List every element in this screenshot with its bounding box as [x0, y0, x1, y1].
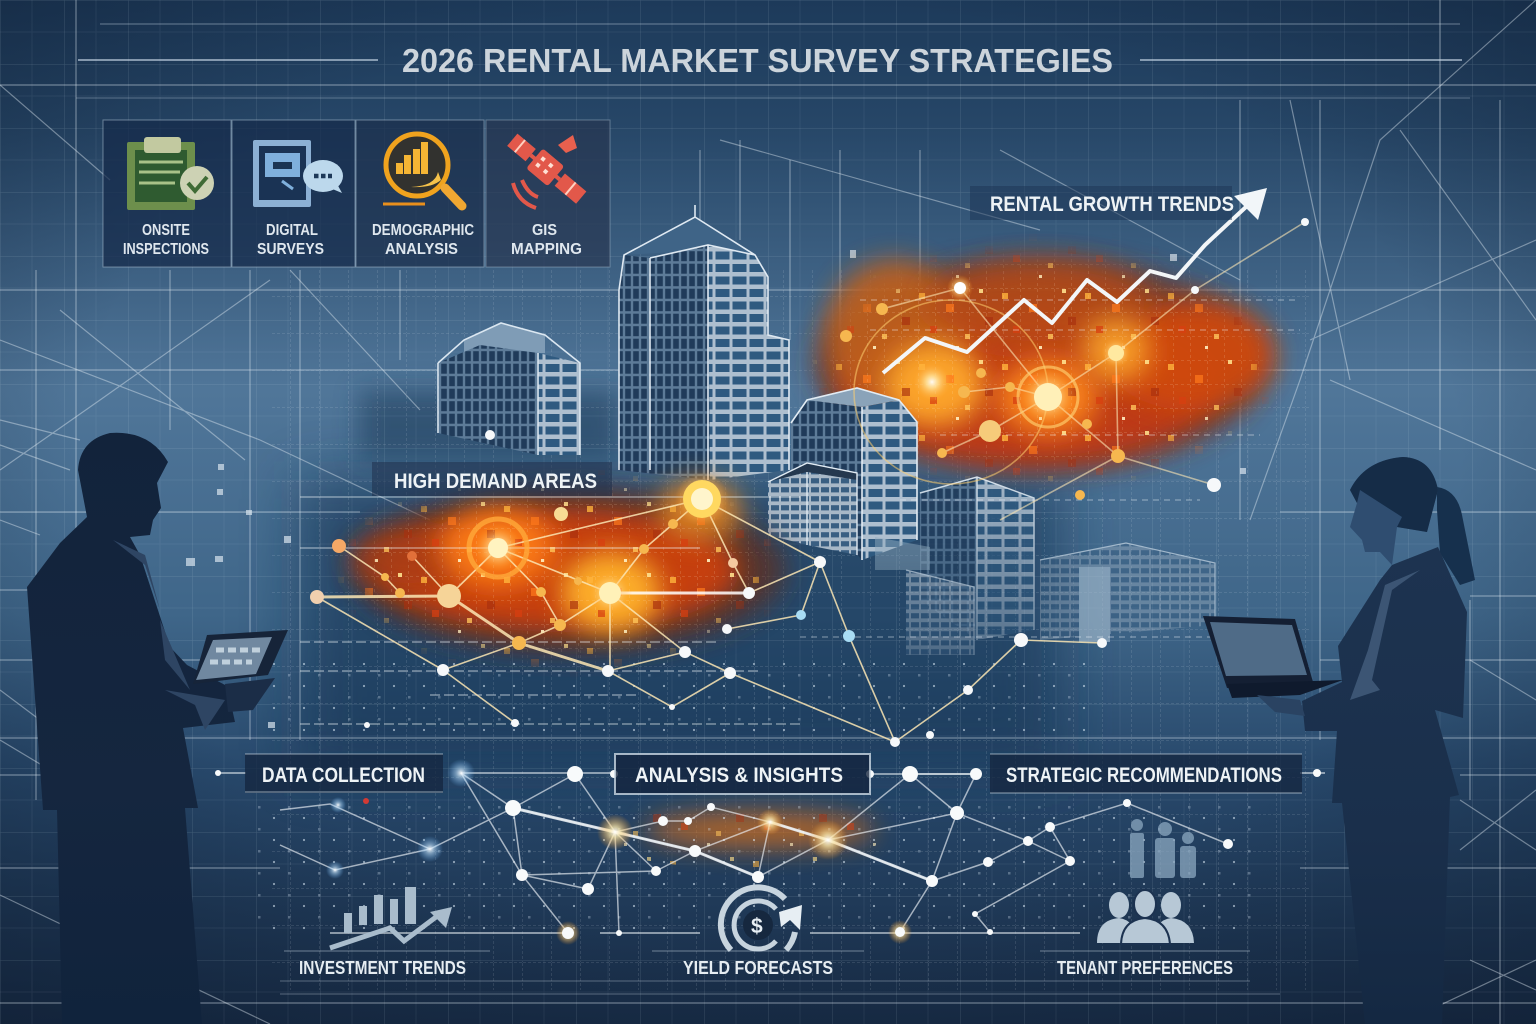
panel: digital surveys: SURVEYS — [257, 241, 324, 258]
panel: gis mapping: MAPPING — [511, 241, 582, 258]
icon: woman's laptop — [1203, 616, 1343, 716]
building: lower front block — [875, 537, 974, 655]
building: right mid tower — [791, 388, 917, 560]
icon: faded people group — [1130, 819, 1196, 878]
lower network connections — [218, 773, 1325, 933]
panel: demographic analysis: DEMOGRAPHIC — [372, 222, 474, 239]
icon: yield forecast dollar — [721, 887, 802, 950]
process step: strategic recommendations: STRATEGIC RECOMMENDATIONS — [1006, 764, 1282, 787]
top frame lines — [76, 24, 1470, 98]
process step: data collection — [245, 754, 443, 793]
silhouette: man with tablet — [27, 433, 235, 1024]
panel: survey methods — [103, 120, 610, 267]
process step: strategic recommendations — [990, 754, 1302, 793]
lower network nodes — [215, 759, 1321, 945]
process step: analysis and insights — [615, 754, 870, 794]
heat map: lower network glow — [600, 808, 880, 868]
building: central tower — [619, 205, 789, 480]
label: high demand areas: HIGH DEMAND AREAS — [394, 470, 597, 493]
data grid rails — [300, 300, 1300, 724]
dotted data field — [250, 655, 1260, 930]
panel: demographic analysis: ANALYSIS — [385, 241, 458, 258]
heat map: upper right — [800, 230, 1300, 500]
process step: data collection: DATA COLLECTION — [262, 764, 425, 787]
heat map: high demand areas — [310, 470, 785, 680]
upper network nodes — [310, 218, 1309, 747]
rental growth chart line — [883, 188, 1267, 373]
building: front low block — [768, 463, 857, 555]
bottom rail lines — [280, 981, 1280, 994]
panel: digital surveys — [232, 120, 355, 267]
label: yield forecasts: YIELD FORECASTS — [683, 958, 833, 978]
icon: yield forecast dollar: $ — [751, 915, 763, 938]
building: right block — [920, 477, 1034, 640]
panel: digital surveys: DIGITAL — [266, 222, 318, 239]
icon: tenant people group — [1097, 890, 1194, 944]
label: rental growth trends — [970, 186, 1234, 220]
panel: onsite inspections: INSPECTIONS — [123, 241, 209, 258]
panel: onsite inspections: ONSITE — [142, 222, 190, 239]
process step: analysis and insights: ANALYSIS & INSIGHTS — [635, 764, 843, 787]
panel: onsite inspections — [103, 120, 231, 267]
silhouette: woman with laptop — [1302, 457, 1475, 1024]
icon: investment trends chart — [330, 887, 452, 948]
panel: gis mapping: GIS — [532, 222, 557, 239]
label: investment trends: INVESTMENT TRENDS — [299, 958, 466, 978]
panel: gis mapping — [486, 120, 610, 267]
icon: man's tablet — [193, 630, 288, 712]
upper network connections — [317, 222, 1305, 742]
building: left mid-rise — [438, 323, 580, 455]
building: faded far right — [1040, 543, 1215, 642]
label: rental growth trends: RENTAL GROWTH TRENDS — [990, 193, 1234, 216]
label: tenant preferences: TENANT PREFERENCES — [1057, 958, 1233, 978]
panel: demographic analysis — [356, 120, 484, 267]
title: 2026 RENTAL MARKET SURVEY STRATEGIES — [402, 42, 1113, 79]
label: high demand areas — [372, 462, 612, 496]
